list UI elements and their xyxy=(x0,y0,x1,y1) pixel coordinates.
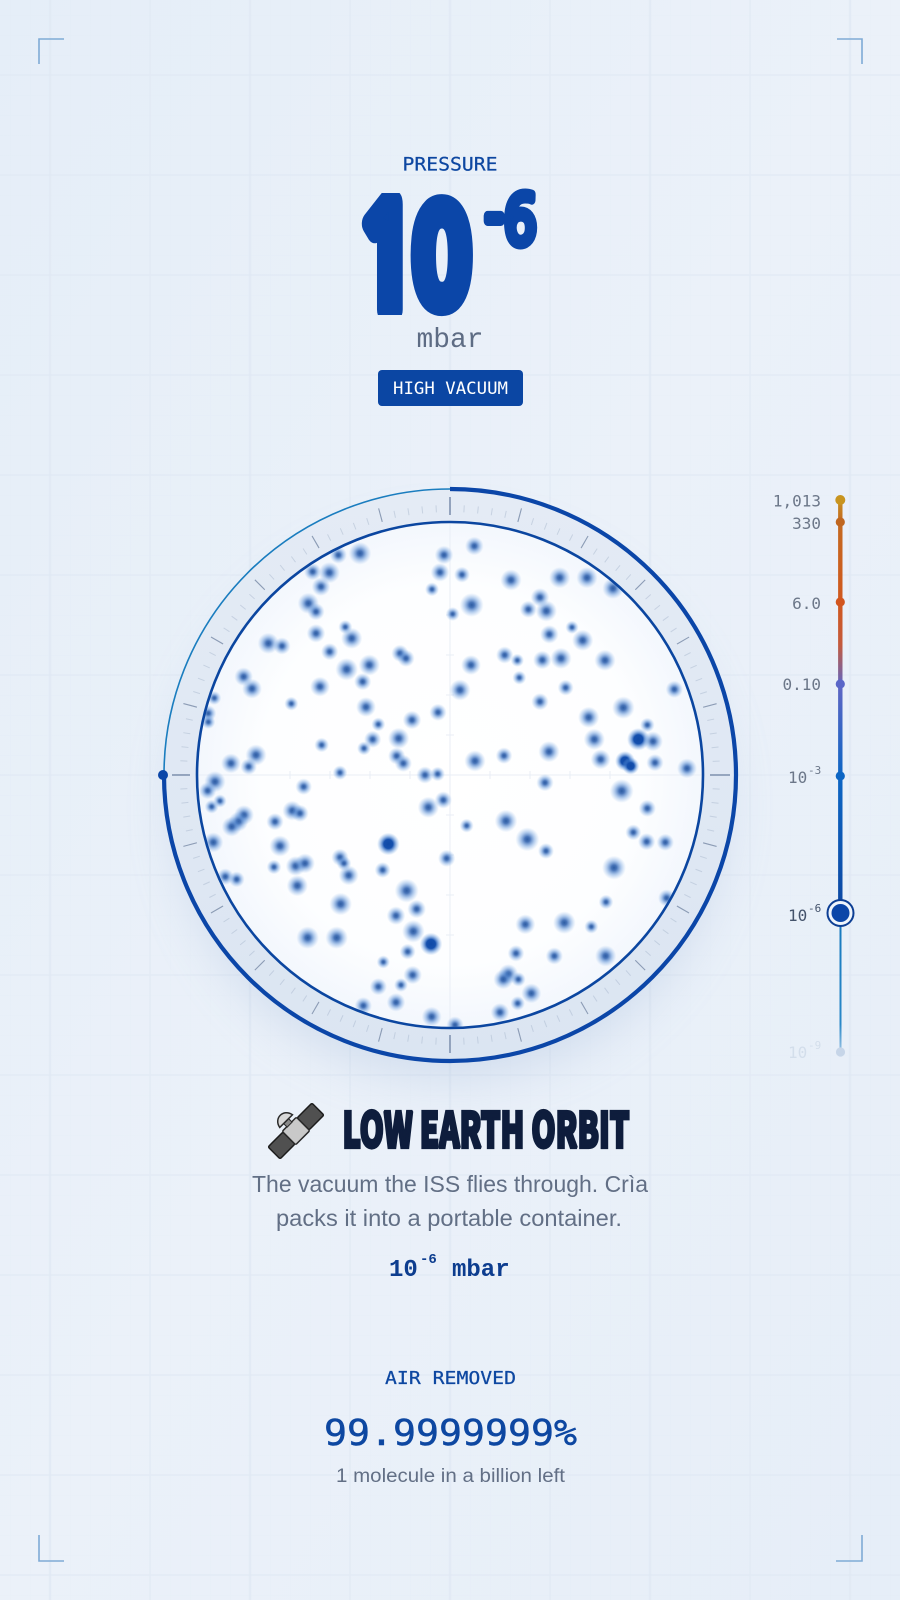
scale labels: 6.0 xyxy=(792,594,821,613)
exponent -6: -6 xyxy=(484,189,537,256)
molecules xyxy=(199,537,697,1034)
scale line remaining xyxy=(840,913,842,1052)
scale labels: 10 xyxy=(788,906,807,925)
pressure readout: mbar xyxy=(452,1257,510,1284)
stat: air removed xyxy=(324,1368,577,1487)
crosshair xyxy=(197,522,703,1028)
stat value: 99.9999999% xyxy=(324,1413,577,1454)
scale labels: 10 xyxy=(788,1043,807,1062)
label: pressure: PRESSURE xyxy=(402,154,498,176)
gauge ticks xyxy=(172,497,730,1053)
scale labels: 330 xyxy=(792,514,821,533)
badge: high vacuum xyxy=(378,370,523,406)
gauge ring band xyxy=(164,489,736,1061)
icon: satellite xyxy=(258,1093,325,1160)
scale stops xyxy=(835,495,845,1057)
scale labels: -9 xyxy=(808,1039,821,1052)
stat caption: 1 molecule in a billion left xyxy=(336,1466,566,1487)
description: The vacuum the ISS flies through. Crìa xyxy=(252,1171,648,1197)
pressure scale xyxy=(773,492,854,1062)
chamber inner ring xyxy=(197,522,703,1028)
current stop marker xyxy=(828,900,854,926)
big number 10 xyxy=(362,193,473,316)
scale line filled xyxy=(838,500,842,913)
scale labels: 10 xyxy=(788,768,807,787)
heading: low earth orbit: LOW EARTH ORBIT xyxy=(342,1092,630,1162)
pressure readout: 10 xyxy=(389,1257,418,1284)
gauge marker dot xyxy=(158,770,168,780)
stat label: AIR REMOVED xyxy=(385,1368,516,1389)
vacuum chamber gauge xyxy=(158,489,736,1077)
gauge thin remaining arc xyxy=(164,489,450,775)
scale labels: 1,013 xyxy=(773,492,821,510)
chamber disc xyxy=(197,522,703,1028)
chamber shadow xyxy=(178,533,722,1077)
scale labels: -6 xyxy=(808,902,821,915)
scale labels xyxy=(773,492,821,1062)
pressure header xyxy=(356,154,537,356)
pressure readout xyxy=(389,1252,510,1284)
description: packs it into a portable container. xyxy=(276,1205,622,1231)
gauge outer progress arc xyxy=(164,489,736,1061)
pressure readout: -6 xyxy=(420,1252,437,1268)
scale labels: 0.10 xyxy=(782,675,821,694)
unit mbar: mbar xyxy=(416,325,484,356)
scale labels: -3 xyxy=(808,764,821,777)
big number 10: 0 xyxy=(412,194,470,325)
big number 10: 1 xyxy=(356,188,420,333)
badge: high vacuum: HIGH VACUUM xyxy=(393,379,508,398)
description xyxy=(252,1171,648,1231)
